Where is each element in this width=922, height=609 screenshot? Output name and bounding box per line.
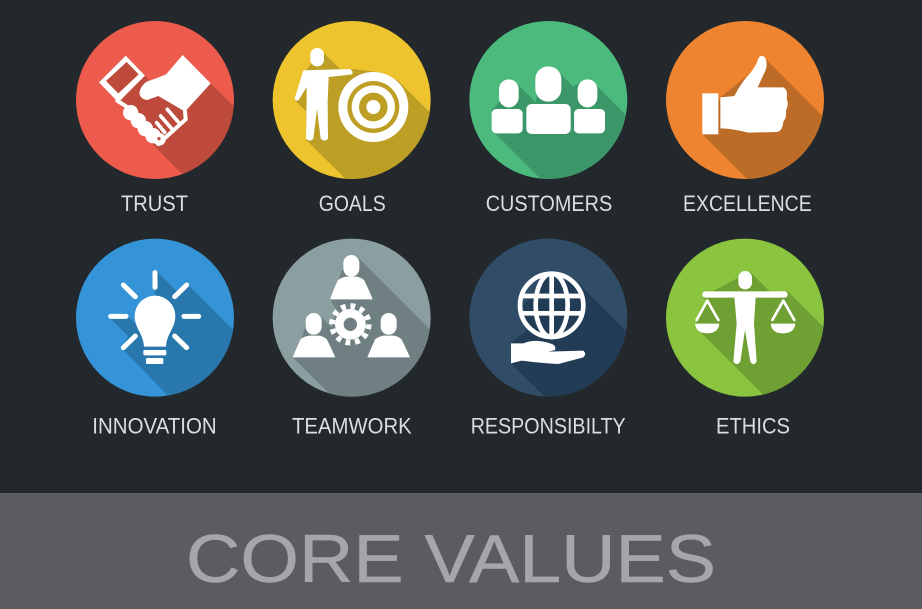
icon: person with scales on green circle <box>666 238 824 397</box>
panel: excellence <box>666 21 824 211</box>
icon: light bulb on blue circle <box>76 238 234 397</box>
panel: innovation <box>76 238 234 434</box>
panel: ethics <box>666 238 824 434</box>
label: responsibility: RESPONSIBILTY <box>471 414 626 438</box>
icon: three people and gear on grey circle <box>272 238 431 397</box>
panel: goals <box>273 21 443 216</box>
label: teamwork: TEAMWORK <box>292 414 412 438</box>
icon: thumbs up on orange circle <box>666 21 824 179</box>
icon: person and target on yellow circle <box>272 21 431 179</box>
label: excellence: EXCELLENCE <box>683 191 812 216</box>
label: trust: TRUST <box>121 191 188 216</box>
icon: three people on green circle <box>469 21 628 179</box>
icon: globe on hand on navy circle <box>469 238 628 397</box>
label: innovation: INNOVATION <box>92 414 217 438</box>
label: customers: CUSTOMERS <box>486 191 612 216</box>
panel: customers <box>469 21 628 211</box>
label: ethics: ETHICS <box>716 414 790 438</box>
title: core values: CORE VALUES <box>186 521 716 597</box>
panel: trust <box>76 21 234 211</box>
panel: responsibility <box>469 238 628 434</box>
label: goals: GOALS <box>319 191 386 216</box>
icon: handshake on red circle <box>76 21 234 179</box>
footer band <box>0 493 922 609</box>
panel: teamwork <box>272 238 431 434</box>
